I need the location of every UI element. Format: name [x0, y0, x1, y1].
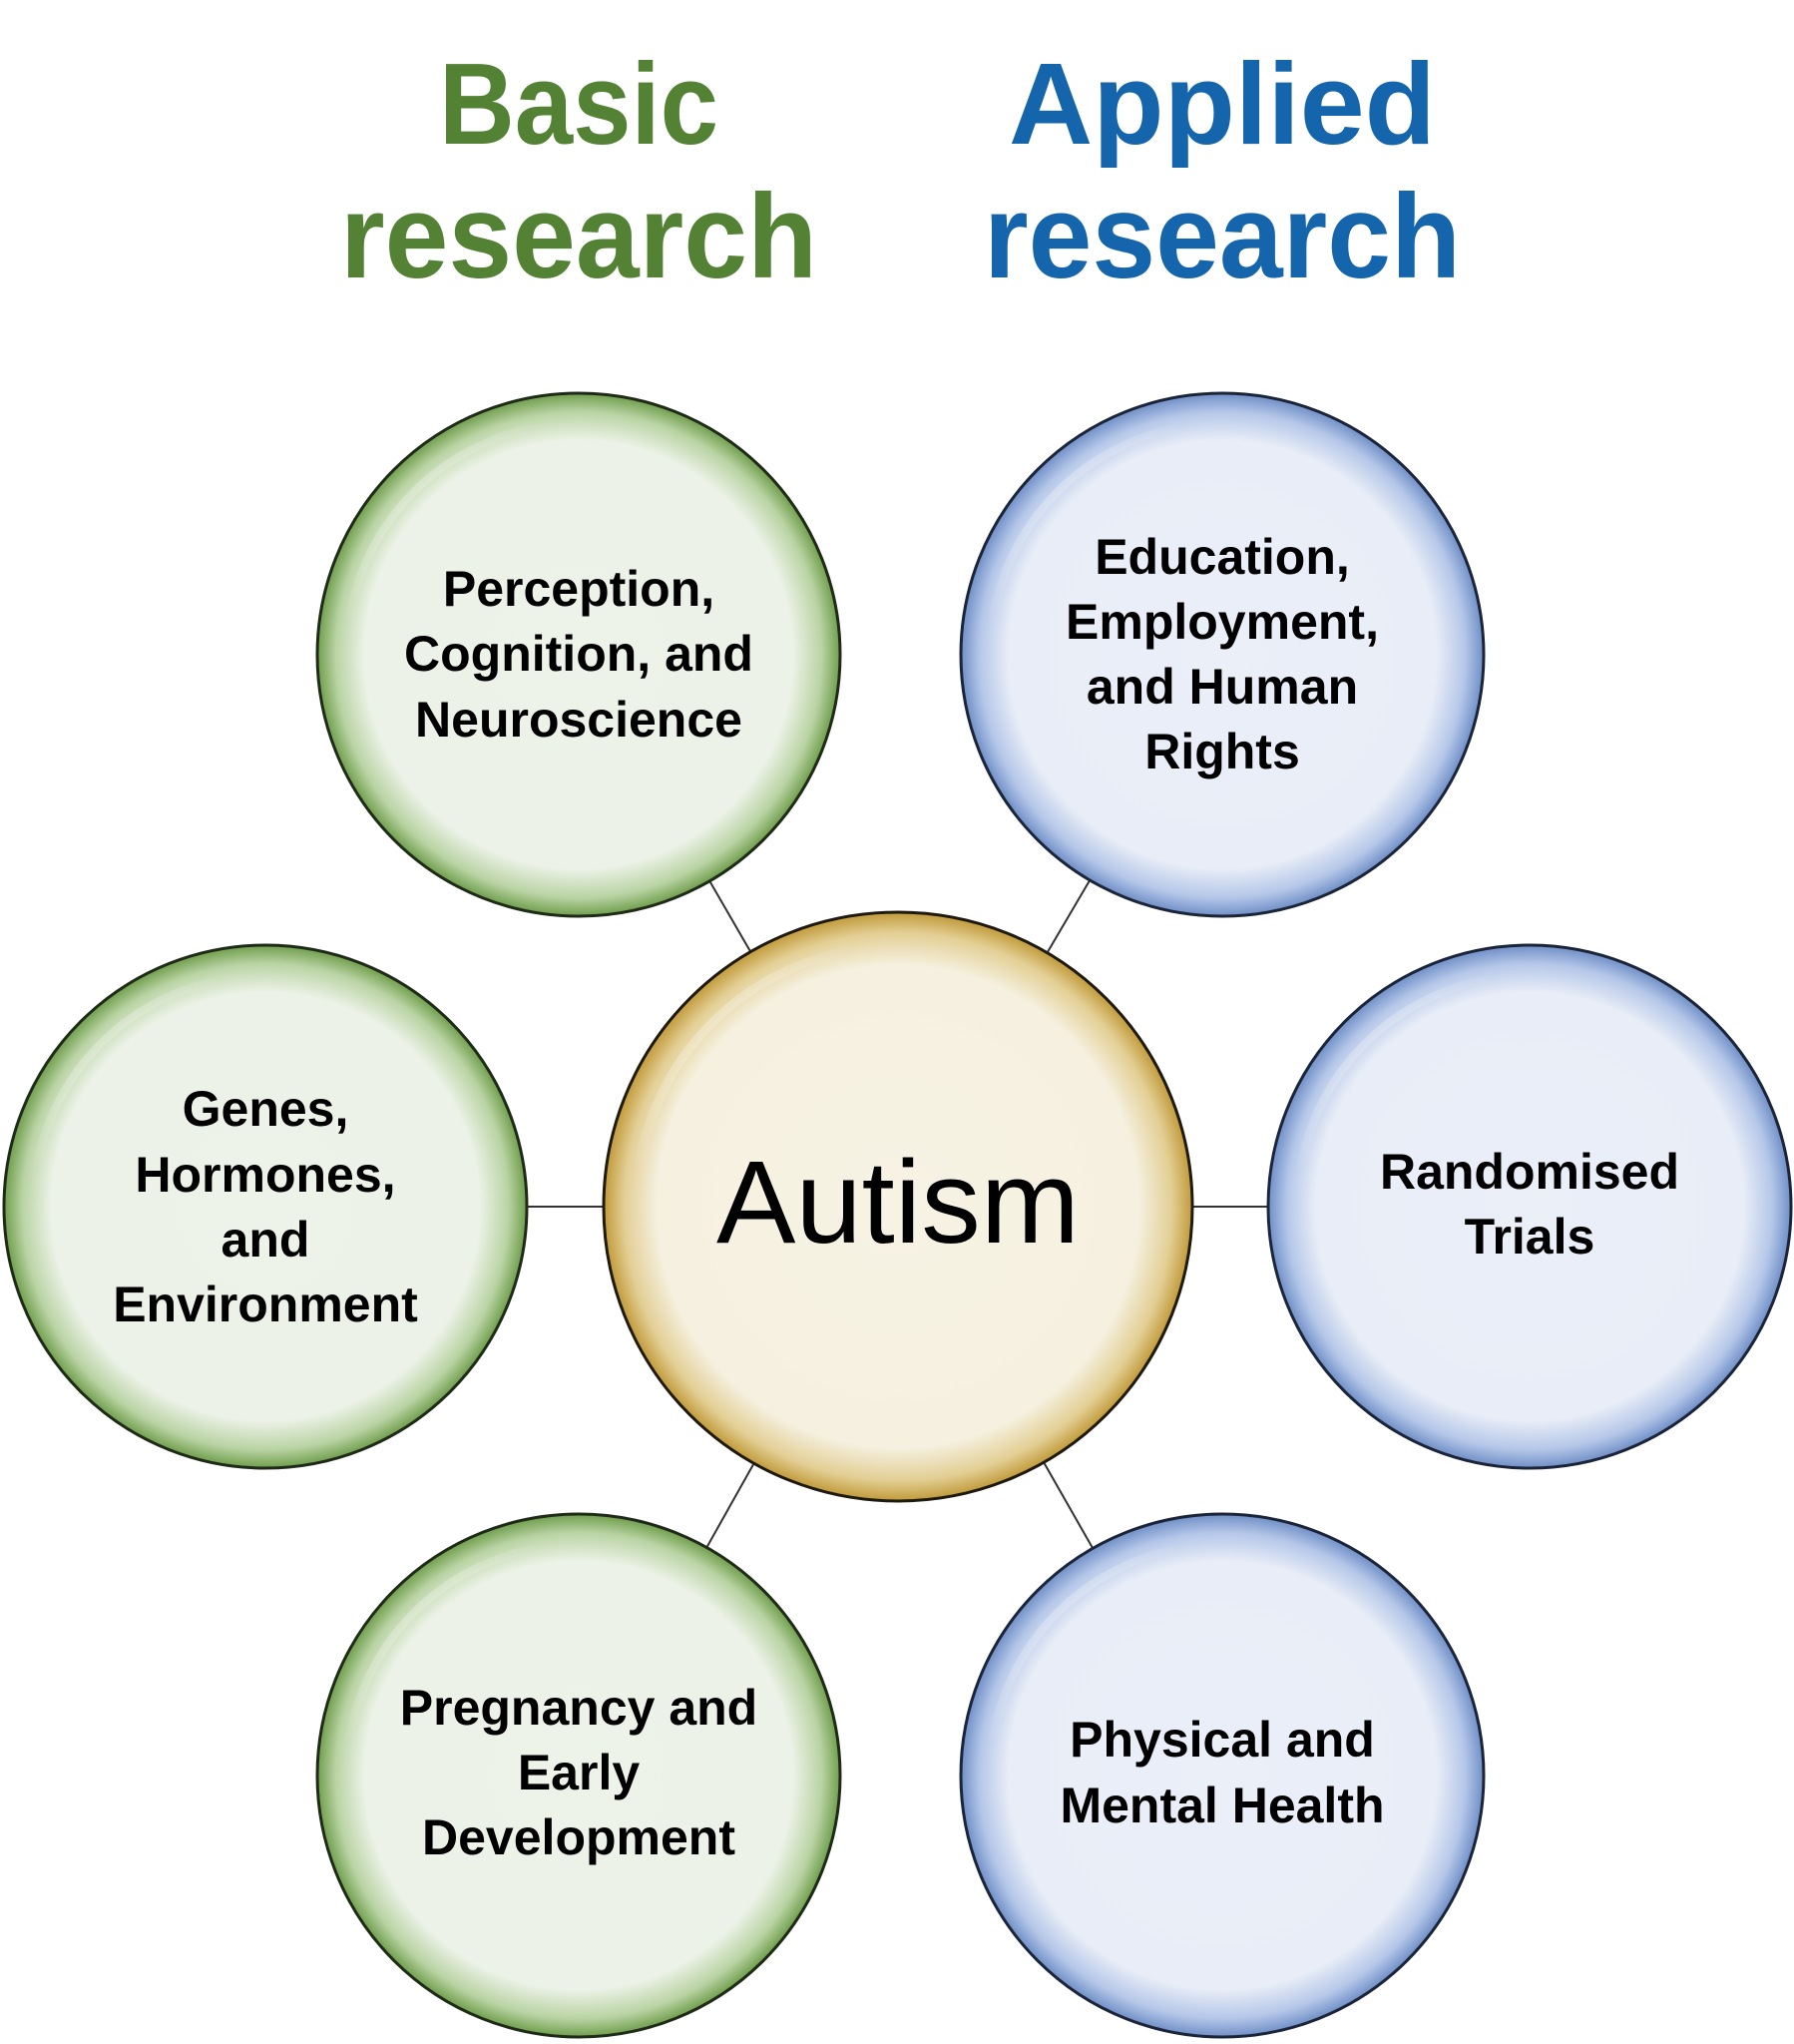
circle: Randomised Trials: Randomised — [1380, 1144, 1679, 1200]
title: Applied research — [984, 39, 1461, 303]
circle: Perception, Cognition, and Neuroscience: Cognition, and — [404, 626, 753, 682]
circle: Pregnancy and Early Development: Early — [518, 1745, 640, 1800]
circle: Genes, Hormones, and Environment: and — [222, 1212, 309, 1268]
circle: Education, Employment, and Human Rights: Rights — [1144, 724, 1300, 779]
circle: Physical and Mental Health: Mental Health — [1060, 1778, 1385, 1833]
circle: Genes, Hormones, and Environment: Genes, — [183, 1081, 348, 1137]
circle: Genes, Hormones, and Environment — [4, 945, 527, 1468]
circle: Genes, Hormones, and Environment: Environment — [113, 1277, 418, 1332]
circle: Pregnancy and Early Development: Development — [422, 1809, 735, 1865]
circle: Autism (center) — [604, 912, 1192, 1501]
circle: Education, Employment, and Human Rights: Employment, — [1066, 594, 1379, 650]
circle: Education, Employment, and Human Rights: and Human — [1087, 659, 1358, 715]
circle: Perception, Cognition, and Neuroscience: Neuroscience — [415, 692, 742, 748]
circle: Randomised Trials — [1268, 945, 1791, 1468]
title: Applied research: research — [984, 170, 1461, 303]
circle: Perception, Cognition, and Neuroscience — [317, 393, 840, 916]
title: Basic research — [340, 39, 817, 303]
circle: Perception, Cognition, and Neuroscience: Perception, — [443, 561, 714, 617]
connector lines — [265, 655, 1530, 1776]
circle: Randomised Trials: Trials — [1465, 1209, 1594, 1265]
circle: Education, Employment, and Human Rights: Education, — [1095, 529, 1350, 585]
title: Basic research: Basic — [439, 39, 718, 169]
circle: Pregnancy and Early Development — [317, 1514, 840, 2037]
circle: Pregnancy and Early Development: Pregnancy and — [400, 1680, 757, 1736]
title: Applied research: Applied — [1009, 39, 1436, 169]
circle: Physical and Mental Health: Physical and — [1070, 1712, 1375, 1768]
circle: Physical and Mental Health — [961, 1514, 1484, 2037]
circle: Education, Employment, and Human Rights — [961, 393, 1484, 916]
title: Basic research: research — [340, 170, 817, 303]
circle: Autism (center): Autism — [716, 1137, 1080, 1269]
circle: Genes, Hormones, and Environment: Hormones, — [135, 1147, 396, 1203]
